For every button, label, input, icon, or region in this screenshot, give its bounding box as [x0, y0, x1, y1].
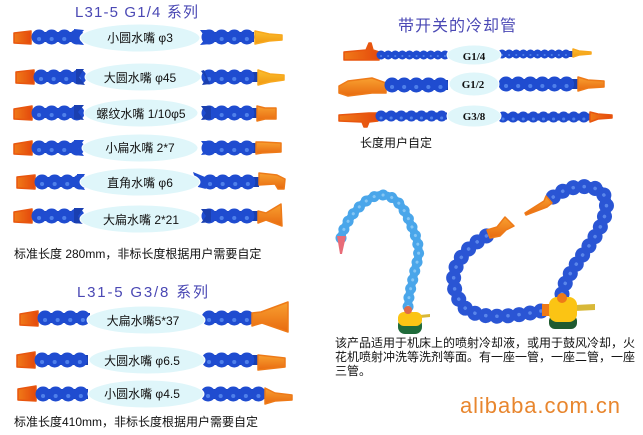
switch hose G1/4: G1/4: [463, 51, 486, 63]
product description: 三管。: [335, 363, 371, 378]
switch hose G3/8: [339, 105, 612, 127]
hose row: large round nozzle 6.5: 大圆水嘴 φ6.5: [104, 354, 180, 368]
product description: [335, 335, 635, 378]
hose row: large flat nozzle 5*37: 大扁水嘴5*37: [107, 314, 180, 328]
product description: 该产品适用于机床上的喷射冷却液，或用于鼓风冷却，火: [335, 335, 635, 350]
hose row: large round nozzle 45: 大圆水嘴 φ45: [104, 71, 177, 85]
heading: G1/4 series: L31-5 G1/4 系列: [75, 4, 198, 21]
hose row: small round nozzle 4.5: 小圆水嘴 φ4.5: [104, 387, 180, 401]
note: standard length 280mm: 标准长度 280mm，非标长度根据用户需要自定: [14, 246, 261, 261]
note: standard length 410mm: 标准长度410mm，非标长度根据用户需要自定: [14, 414, 258, 429]
hose row: right angle nozzle 6: 直角水嘴 φ6: [107, 176, 173, 190]
hose row: small flat nozzle 2*7: [14, 134, 281, 162]
hose row: small flat nozzle 2*7: 小扁水嘴 2*7: [105, 141, 175, 155]
heading: G3/8 series: L31-5 G3/8 系列: [77, 284, 208, 301]
switch hose G1/2: G1/2: [462, 79, 485, 91]
hose row: threaded nozzle 1/10: [14, 99, 276, 127]
hose row: small round nozzle 3: [14, 24, 282, 52]
hose row: large flat nozzle 5*37: [20, 302, 288, 334]
watermark: alibaba.com.cn: alibaba.com.cn: [460, 393, 620, 418]
product photo: single light blue hose on base: [337, 195, 430, 334]
heading: cooling pipes with switch: 带开关的冷却管: [398, 17, 516, 35]
switch hose G1/2: [339, 72, 604, 96]
hose row: small round nozzle 4.5: [18, 380, 292, 408]
hose row: large round nozzle 45: [16, 63, 284, 91]
hose row: large flat nozzle 2*21: 大扁水嘴 2*21: [103, 213, 179, 227]
hose row: right angle nozzle 6: [17, 168, 285, 196]
note: length user defined: 长度用户自定: [360, 135, 432, 150]
hose row: small round nozzle 3: 小圆水嘴 φ3: [107, 31, 173, 45]
hose row: threaded nozzle 1/10: 螺纹水嘴 1/10φ5: [96, 107, 186, 121]
product photo: double dark blue hoses on base: [454, 187, 606, 329]
switch hose G3/8: G3/8: [463, 111, 486, 123]
hose row: large round nozzle 6.5: [17, 346, 285, 374]
hose row: large flat nozzle 2*21: [14, 204, 282, 233]
product description: 花机喷射冲洗等洗剂等面。有一座一管，一座二管，一座: [335, 349, 635, 364]
switch hose G1/4: [344, 43, 591, 65]
